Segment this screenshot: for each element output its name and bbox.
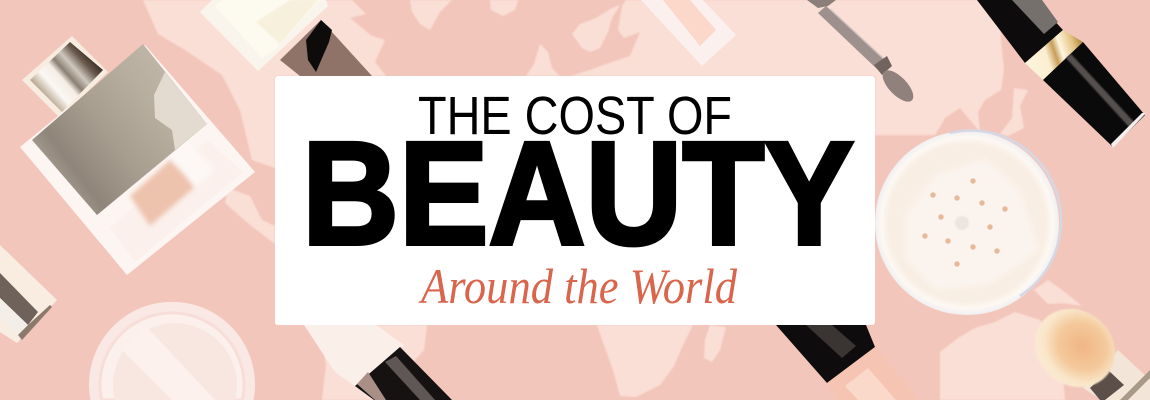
map: madagascar [704,325,726,362]
top cream jar [200,0,328,71]
mascara gold band [1025,30,1083,80]
heading: the cost of: THE COST OF [418,86,732,146]
top brown stick [280,20,372,76]
top lip gloss [641,0,736,66]
perfume bottle [20,36,255,275]
mascara body [1043,42,1146,148]
map: south america [318,325,427,400]
mascara tube [977,0,1146,148]
perfume nozzle [22,36,108,118]
map: eurasia [570,0,1004,135]
heading: beauty: BEAUTY [302,112,854,276]
map: scandinavia [572,5,620,52]
perfume powder [130,138,215,226]
left gold cap [0,245,57,343]
perfume silver lid [32,44,207,215]
subheading: around the world: Around the World [418,258,738,314]
map: north america [143,0,386,244]
perfume glass [20,45,255,275]
map: new guinea [1034,280,1082,306]
map: greenland and iceland [410,0,518,30]
loose powder jar [875,131,1061,315]
bottom stick [304,325,452,400]
title panel [275,76,875,325]
map: australia [940,312,1065,400]
powder puff [89,302,255,400]
brush bristles [1019,293,1131,400]
makeup brush [1019,293,1150,400]
map: united kingdom [526,44,560,76]
map: japan [1000,88,1028,136]
brush handle [1083,350,1150,400]
mascara cap [977,0,1063,63]
eyeshadow applicator [807,0,918,107]
powder sifter holes [922,178,1008,267]
map: africa [597,325,693,397]
bottom lip gloss [776,325,919,400]
